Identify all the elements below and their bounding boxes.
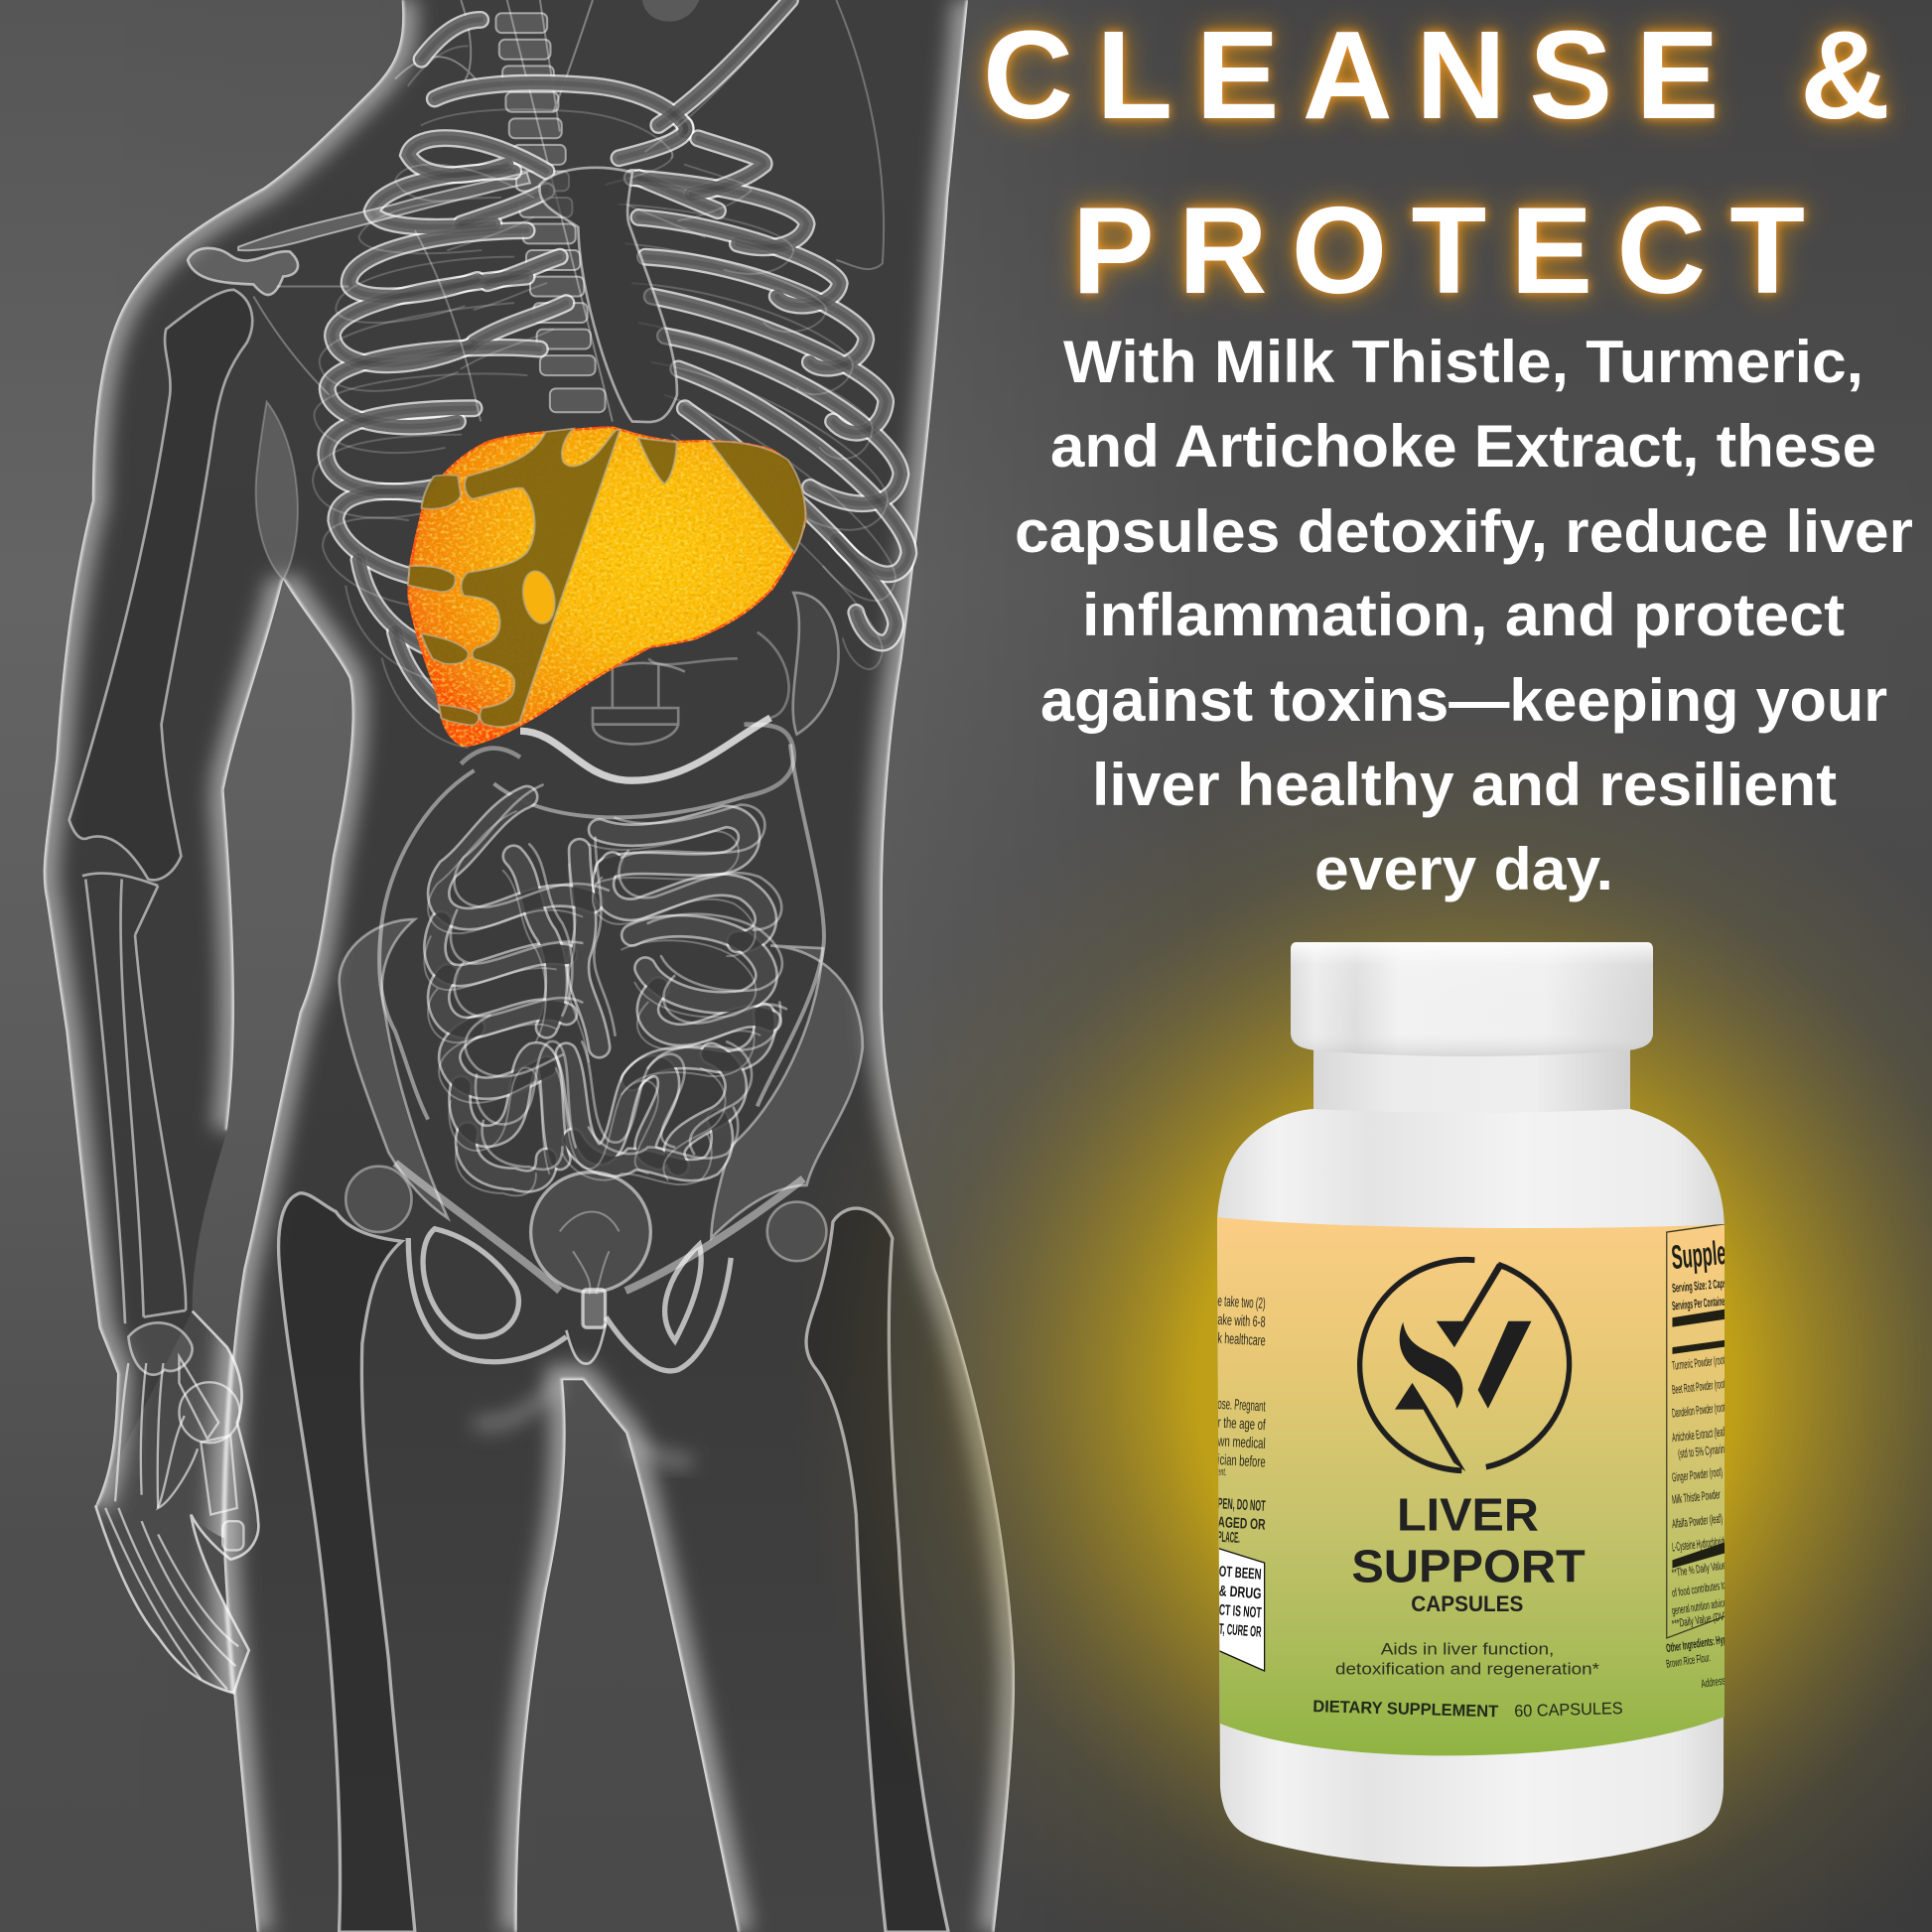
figure: translucent human body with skeleton bbox=[44, 0, 1015, 1932]
text: L-Cysteine Hydrochloride bbox=[1671, 1534, 1727, 1555]
bottle body bbox=[1217, 1109, 1725, 1866]
body silhouette bbox=[44, 0, 1015, 1932]
bones: collarbone and shoulder joint bbox=[188, 173, 530, 422]
liver body bbox=[408, 427, 806, 747]
left side directions: AGED OR bbox=[1217, 1514, 1266, 1534]
description text block: With Milk Thistle, Turmeric, bbox=[1063, 329, 1863, 395]
bone: sternum bbox=[539, 168, 677, 422]
supplement and count line: 60 CAPSULES bbox=[1514, 1699, 1623, 1721]
bottle label: Turmeric Powder (root) bbox=[1671, 1352, 1727, 1373]
left side directions: PLACE. bbox=[1217, 1529, 1240, 1547]
right side supplement facts panel: Artichoke Extract (leaf) bbox=[1671, 1424, 1727, 1445]
description text block: and Artichoke Extract, these bbox=[1050, 413, 1876, 480]
left side directions: k healthcare bbox=[1217, 1330, 1266, 1350]
supplement and count line bbox=[1312, 1697, 1623, 1722]
left side FDA notice box: OT BEEN bbox=[1218, 1564, 1262, 1584]
bottle label bbox=[1211, 1206, 1732, 1772]
description text block: capsules detoxify, reduce liver bbox=[1015, 498, 1913, 565]
description text block: liver healthy and resilient bbox=[1092, 752, 1837, 818]
liver: bright hole in tissue bbox=[519, 569, 559, 625]
text: Servings Per Container bbox=[1672, 1294, 1727, 1313]
product tagline: Aids in liver function, bbox=[1381, 1640, 1554, 1659]
bones: forearm and wrist bbox=[82, 874, 193, 1375]
bones: pubic ring and pelvis floor bbox=[395, 1163, 803, 1371]
left side directions: ent. bbox=[1217, 1466, 1227, 1478]
right side supplement facts panel: general nutrition advice bbox=[1671, 1597, 1726, 1617]
bone: left femur bbox=[279, 1167, 415, 1932]
bone: spine vertebrae bbox=[395, 0, 613, 422]
title: PROTECT bbox=[1072, 183, 1805, 320]
bones: rib cage bbox=[313, 0, 908, 748]
left side directions bbox=[1216, 1294, 1267, 1547]
right side supplement facts panel: Milk Thistle Powder bbox=[1671, 1487, 1721, 1507]
left side directions: wn medical bbox=[1216, 1434, 1266, 1452]
product name: SUPPORT bbox=[1351, 1542, 1586, 1592]
right side supplement facts panel: Other Ingredients: Hyp bbox=[1666, 1634, 1727, 1655]
product tagline bbox=[1335, 1640, 1600, 1679]
right side supplement facts panel: Ginger Powder (root) bbox=[1671, 1464, 1723, 1485]
bones: pelvis ilium bbox=[340, 919, 863, 1238]
text: Beet Root Powder (root) bbox=[1671, 1376, 1727, 1397]
liver: darker ribs and tissue overlay bbox=[408, 429, 805, 727]
text: Dandelion Powder (root) bbox=[1671, 1400, 1727, 1421]
product tagline: detoxification and regeneration* bbox=[1335, 1660, 1600, 1679]
title bbox=[983, 5, 1890, 320]
right side supplement facts panel: Serving Size: 2 Caps bbox=[1672, 1276, 1727, 1296]
left side directions: e take two (2) bbox=[1217, 1294, 1266, 1312]
right side supplement facts panel: ***Daily Value (DV) bbox=[1671, 1610, 1727, 1631]
right side supplement facts panel: Brown Rice Flour. bbox=[1666, 1652, 1712, 1671]
right side supplement facts panel: Supple bbox=[1670, 1234, 1727, 1276]
description text block: every day. bbox=[1314, 836, 1613, 902]
bottle cap bbox=[1291, 942, 1653, 1056]
description text block bbox=[1015, 329, 1913, 902]
left side FDA notice box: CT IS NOT bbox=[1218, 1602, 1262, 1622]
right side supplement facts panel: **The % Daily Value bbox=[1671, 1560, 1726, 1580]
product glow behind bottle bbox=[791, 710, 1932, 1932]
title: CLEANSE & bbox=[983, 5, 1890, 145]
left side FDA notice box: & DRUG bbox=[1218, 1584, 1262, 1603]
bone: left arm humerus bbox=[69, 290, 252, 880]
right side supplement facts panel: Address bbox=[1701, 1675, 1726, 1691]
description text block: against toxins—keeping your bbox=[1040, 667, 1887, 734]
right side supplement facts panel bbox=[1666, 1223, 1729, 1691]
product name bbox=[1352, 1499, 1585, 1611]
crotch highlights bbox=[475, 1383, 691, 1462]
left side directions: ician before bbox=[1217, 1451, 1266, 1471]
right side supplement facts panel: of food contributes to bbox=[1671, 1580, 1726, 1600]
icon: SV logo bbox=[1360, 1260, 1570, 1471]
product name: LIVER bbox=[1397, 1490, 1539, 1541]
liver bbox=[408, 427, 806, 747]
left side directions: ake with 6-8 bbox=[1217, 1311, 1266, 1331]
organs: stomach and abdomen outlines bbox=[379, 593, 839, 1120]
bottle neck bbox=[1313, 1042, 1630, 1117]
left side directions: r the age of bbox=[1217, 1415, 1267, 1434]
left side directions: PEN, DO NOT bbox=[1217, 1496, 1266, 1515]
organs: intestines bbox=[424, 785, 786, 1195]
left side directions: ose. Pregnant bbox=[1217, 1396, 1266, 1416]
right side supplement facts panel: Alfalfa Powder (leaf) bbox=[1671, 1511, 1724, 1531]
description text block: inflammation, and protect bbox=[1082, 582, 1845, 648]
supplement and count line: DIETARY SUPPLEMENT bbox=[1312, 1697, 1498, 1722]
bone: right femur bbox=[767, 1202, 948, 1932]
label artwork bbox=[1216, 1223, 1729, 1722]
left side FDA notice box bbox=[1217, 1548, 1265, 1671]
organ: bladder bbox=[531, 1173, 650, 1294]
left side FDA notice box: T, CURE OR bbox=[1218, 1621, 1262, 1641]
right side supplement facts panel: (std to 5% Cynarin) bbox=[1678, 1442, 1727, 1461]
icon: hand outline, bones and fingers bbox=[95, 1311, 258, 1693]
product name: CAPSULES bbox=[1411, 1591, 1523, 1616]
product bottle bbox=[1211, 942, 1732, 1866]
